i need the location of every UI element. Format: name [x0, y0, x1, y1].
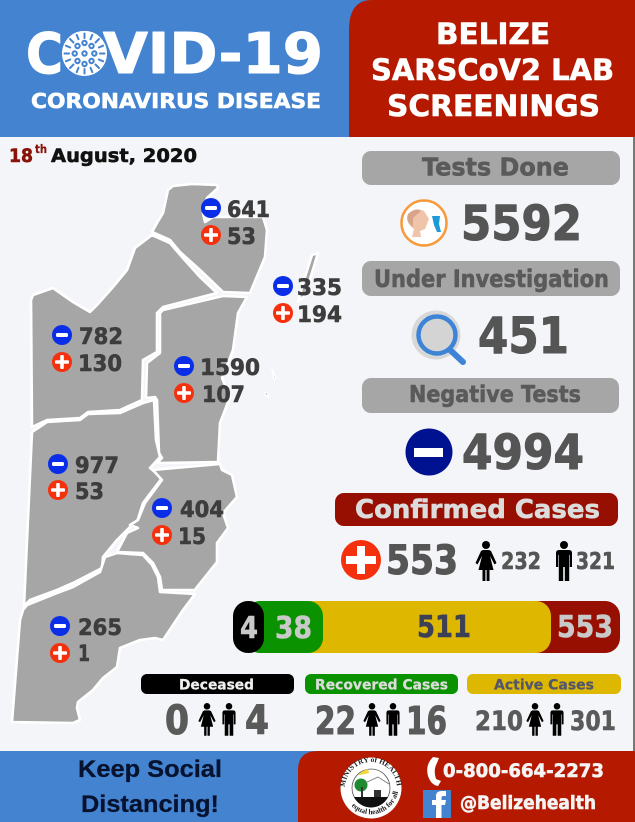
district: Stann Creek: 15 — [178, 525, 206, 550]
footer: social distancing message: Distancing! — [81, 791, 219, 818]
district: Toledo: 1 — [78, 642, 90, 667]
panel: under investigation — [362, 261, 620, 365]
date: August, 2020 — [51, 145, 197, 167]
panel: confirmed cases: Confirmed Cases — [355, 495, 600, 525]
district: Cayo — [48, 454, 119, 505]
icon: magnifier — [412, 310, 463, 362]
stacked case bar — [233, 601, 620, 653]
date: 18 — [9, 145, 33, 167]
district: Corozal: 641 — [227, 198, 270, 223]
district: Toledo: 265 — [78, 616, 122, 641]
panel: negative tests: Negative Tests — [409, 380, 581, 408]
district: Stann Creek: 404 — [180, 498, 224, 523]
header: lab screenings panel: SCREENINGS — [387, 89, 600, 123]
map of Belize districts — [12, 184, 318, 723]
district: Belize Cayes — [273, 276, 342, 328]
stacked case bar: 553 — [557, 610, 613, 645]
panel: confirmed cases: 321 — [576, 549, 615, 575]
panel: confirmed cases: 553 — [386, 538, 458, 584]
subtitle: CORONAVIRUS DISEASE — [31, 89, 321, 113]
district: Belize Cayes: 335 — [297, 276, 342, 301]
panel: negative tests — [362, 378, 619, 481]
icon: phone — [427, 757, 441, 786]
stacked case bar: 4 — [240, 611, 258, 646]
icon: man — [556, 541, 572, 581]
panel: tests done: Tests Done — [422, 152, 569, 182]
logo: Ministry of Health: MINISTRY of HEALTH — [340, 757, 402, 787]
footer: contact panel: 0-800-664-2273 — [443, 760, 604, 782]
header: lab screenings panel — [349, 0, 635, 137]
title: COVID-19: O — [62, 22, 107, 87]
district: Cayo: 53 — [75, 480, 104, 505]
panel: recovered cases: 22 — [315, 699, 356, 743]
icon: coronavirus — [62, 31, 107, 76]
header: lab screenings panel: BELIZE — [436, 17, 550, 51]
panel: deceased: 4 — [245, 698, 269, 744]
district: Orange Walk: 782 — [79, 325, 123, 350]
logo: Ministry of Health — [340, 757, 402, 818]
district: Corozal — [201, 198, 270, 250]
footer: social distancing message — [0, 751, 320, 822]
panel: recovered cases — [305, 674, 458, 743]
icon: woman — [476, 541, 496, 581]
title: COVID-19: VID-19 — [103, 22, 323, 87]
panel: under investigation: 451 — [478, 307, 569, 365]
icon: nasal swab test — [402, 200, 446, 246]
district: Belize: 107 — [202, 383, 245, 408]
district: Stann Creek — [152, 498, 224, 550]
header: COVID-19 title panel — [0, 0, 370, 137]
panel: active cases: 210 — [475, 706, 523, 737]
panel: deceased: Deceased — [179, 678, 254, 694]
date: th — [35, 142, 47, 156]
district: Belize Cayes: 194 — [297, 303, 342, 328]
date — [9, 142, 197, 167]
header: lab screenings panel: SARSCoV2 LAB — [371, 53, 614, 87]
panel: active cases — [467, 674, 621, 737]
panel: confirmed cases — [335, 493, 618, 584]
icon: plus — [341, 540, 381, 580]
panel: tests done: 5592 — [461, 196, 582, 252]
footer: contact panel: @Belizehealth — [460, 792, 596, 814]
panel: tests done — [362, 151, 620, 252]
panel: negative tests: 4994 — [462, 425, 584, 481]
district: Cayo: 977 — [75, 454, 119, 479]
district: Belize: 1590 — [200, 356, 260, 381]
panel: active cases: Active Cases — [494, 678, 594, 694]
stacked case bar: 511 — [417, 610, 471, 645]
stacked case bar: 38 — [275, 611, 312, 646]
title: COVID-19: C — [26, 22, 63, 87]
panel: confirmed cases: 232 — [501, 549, 541, 575]
district: Belize — [174, 356, 260, 408]
district: Corozal: 53 — [227, 225, 256, 250]
footer: contact panel — [298, 751, 635, 822]
panel: deceased: 0 — [165, 698, 189, 744]
panel: deceased — [141, 674, 294, 744]
district: Orange Walk: 130 — [78, 352, 122, 377]
icon: facebook — [423, 790, 451, 818]
panel: recovered cases: Recovered Cases — [315, 678, 448, 694]
panel: recovered cases: 16 — [406, 699, 447, 743]
district: Orange Walk — [52, 325, 123, 377]
footer: social distancing message: Keep Social — [78, 756, 222, 783]
panel: active cases: 301 — [570, 706, 616, 737]
district: Toledo — [50, 616, 122, 667]
icon: minus — [406, 428, 452, 476]
logo: Ministry of Health: equal health for all — [352, 791, 398, 814]
panel: under investigation: Under Investigation — [374, 265, 609, 293]
